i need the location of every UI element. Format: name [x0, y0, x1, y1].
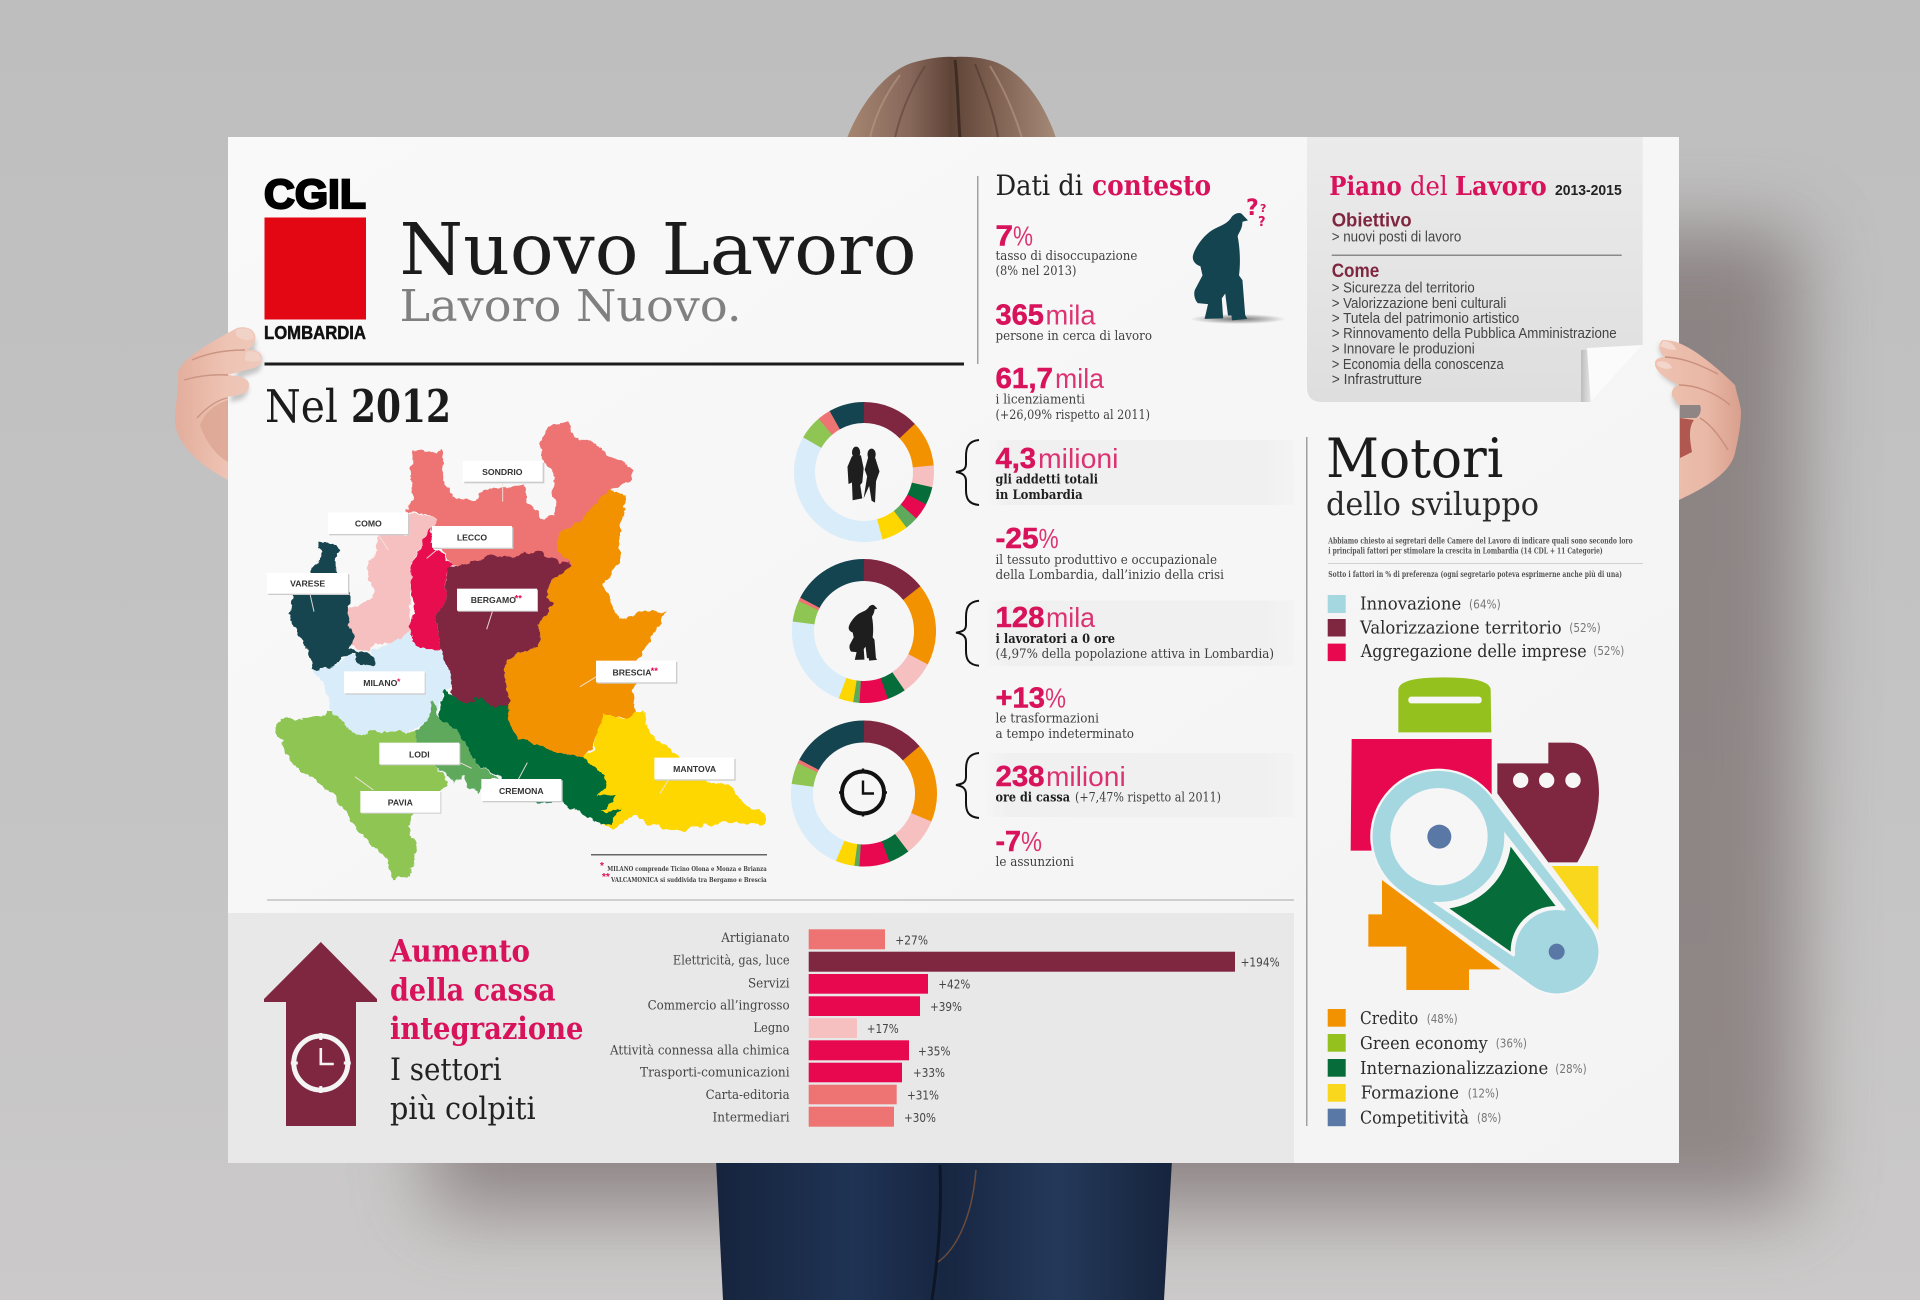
legend: other factors	[1328, 1008, 1587, 1128]
map label: Lodi: LODI	[409, 750, 430, 760]
stat: 61,7mila: 61,7	[996, 363, 1053, 395]
stat: 238 milioni: (+7,47% rispetto al 2011)	[1075, 791, 1221, 806]
legend: top factors: Aggregazione delle imprese	[1360, 641, 1587, 662]
map label: Cremona	[481, 779, 563, 802]
heading: Nel 2012	[265, 380, 451, 433]
map label: Brescia: **	[651, 666, 658, 676]
objective: Obiettivo	[1332, 210, 1412, 231]
stat: 7% disoccupazione: %	[1013, 221, 1033, 252]
panel heading	[1329, 172, 1622, 202]
shape: competitività dots	[1427, 825, 1565, 960]
stat: 238 milioni	[996, 761, 1221, 806]
icon: two people	[847, 447, 880, 503]
stat: 128mila	[996, 602, 1274, 662]
map label: Brescia: BRESCIA	[613, 667, 652, 677]
stat: 365mila: 365	[996, 300, 1044, 332]
shape: internazionalizzazione green	[1449, 847, 1556, 952]
legend: other factors: (48%)	[1427, 1012, 1458, 1026]
person: jeans	[716, 1160, 1172, 1300]
poster sheet	[228, 137, 1679, 1163]
stat: -7%: %	[1021, 826, 1042, 857]
bar: Commercio: +39%	[930, 999, 962, 1014]
legend: other factors: Internazionalizzazione	[1360, 1058, 1548, 1079]
heading: Motori dello sviluppo: dello sviluppo	[1326, 485, 1539, 523]
heading: Motori dello sviluppo: Motori	[1326, 427, 1503, 490]
donut chart 3: ore di cassa	[777, 706, 951, 881]
map footnotes: VALCAMONICA si suddivida tra Bergamo e Brescia	[610, 876, 767, 884]
bar: Servizi	[748, 974, 970, 994]
heading: Aumento della cassa integrazione: Aumento	[389, 934, 530, 970]
map footnotes: *	[600, 861, 604, 872]
panel heading: Lavoro	[1455, 172, 1547, 202]
map label: Sondrio: SONDRIO	[482, 467, 523, 477]
stat: 4,3 milioni	[996, 443, 1118, 503]
heading: Aumento della cassa integrazione: I settori	[390, 1052, 502, 1088]
map label: Lecco	[432, 526, 513, 549]
title: Nuovo Lavoro	[400, 208, 916, 291]
objective: > nuovi posti di lavoro	[1332, 229, 1461, 245]
map label: Milano	[344, 671, 426, 695]
brace 3	[956, 753, 979, 818]
bar: Trasporti	[640, 1063, 945, 1082]
map label: Como	[328, 512, 409, 535]
intro text	[1328, 537, 1643, 580]
map label: Brescia	[596, 661, 677, 684]
how list: Come	[1332, 261, 1379, 282]
stat: 128mila: mila	[1046, 602, 1095, 633]
map label: Sondrio	[463, 461, 544, 483]
hand: right	[1655, 340, 1741, 500]
heading: Aumento della cassa integrazione	[389, 934, 584, 1127]
how list: > Infrastrutture	[1332, 372, 1422, 388]
bar: Intermediari: +30%	[904, 1110, 936, 1125]
stat: 4,3 milioni: milioni	[1038, 443, 1118, 474]
panel: Piano del Lavoro	[1307, 137, 1643, 402]
stat: 7% disoccupazione: tasso di disoccupazione	[996, 249, 1138, 264]
stat: 61,7mila: i licenziamenti	[996, 393, 1085, 408]
brace 2	[956, 601, 979, 666]
map label: Mantova: MANTOVA	[673, 764, 717, 774]
map: Lombardia provinces	[267, 422, 767, 878]
shape: aggregazione pink	[1351, 739, 1492, 851]
stat: -25%	[996, 523, 1224, 583]
legend: other factors: (12%)	[1468, 1086, 1499, 1100]
stat: 365mila: persone in cerca di lavoro	[996, 329, 1152, 344]
stat: 61,7mila: mila	[1055, 363, 1104, 394]
bar: Legno: Legno	[753, 1021, 790, 1036]
panel heading: 2013-2015	[1555, 183, 1622, 199]
heading: Dati di contesto	[996, 169, 1211, 202]
icon: clock in arrow	[291, 1033, 351, 1093]
bar: Servizi: +42%	[938, 976, 970, 991]
intro text: Sotto i fattori in % di preferenza (ogni segretario poteva esprimerne anche più di una)	[1328, 569, 1622, 580]
map label: Varese: VARESE	[290, 579, 325, 589]
province shapes	[275, 422, 767, 878]
stat: 128mila: (4,97% della popolazione attiva in Lombardia)	[996, 647, 1274, 662]
stat: 365mila: mila	[1046, 300, 1096, 331]
legend: top factors	[1328, 594, 1624, 662]
stat: 7% disoccupazione: 7	[996, 221, 1013, 253]
bar: Trasporti: Trasporti-comunicazioni	[640, 1066, 790, 1081]
stat: 238 milioni: milioni	[1046, 761, 1126, 792]
stat: +13%: a tempo indeterminato	[996, 727, 1134, 742]
bar: Attività chimica: +35%	[918, 1044, 951, 1059]
map label: Milano: MILANO	[363, 678, 398, 688]
map footnotes: **	[602, 872, 610, 883]
icon: worker with question marks: ?	[1258, 215, 1266, 230]
how list: > Tutela del patrimonio artistico	[1332, 311, 1519, 327]
legend: top factors: (52%)	[1593, 644, 1624, 658]
legend: top factors: Innovazione	[1360, 594, 1461, 614]
bar: Trasporti: +33%	[913, 1065, 945, 1080]
map label: Como: COMO	[355, 519, 382, 529]
intro text: i principali fattori per stimolare la crescita in Lombardia (14 CDL + 11 Categorie)	[1328, 546, 1603, 557]
legend: other factors: Formazione	[1361, 1083, 1459, 1104]
map footnotes	[591, 854, 767, 884]
heading: Motori dello sviluppo	[1326, 427, 1539, 523]
map label: Varese	[267, 573, 349, 595]
icon: worker with question marks: ?	[1246, 196, 1259, 221]
legend: other factors: (36%)	[1496, 1036, 1527, 1050]
stat: 4,3 milioni: gli addetti totali	[996, 472, 1098, 488]
map label: Milano: *	[397, 677, 401, 687]
stat: 238 milioni: 238	[996, 761, 1044, 793]
how list: > Valorizzazione beni culturali	[1332, 296, 1506, 312]
stat: 238 milioni: ore di cassa	[996, 791, 1070, 806]
subtitle: Lavoro Nuovo.	[400, 281, 742, 332]
bar: Artigianato: +27%	[895, 932, 928, 947]
bar: Artigianato: Artigianato	[720, 931, 790, 946]
bar: Attività chimica: Attività connessa alla chimica	[609, 1043, 790, 1058]
stat: 365mila	[996, 300, 1152, 344]
logo: CGIL Lombardia: CGIL	[264, 171, 366, 217]
shape: green economy	[1398, 677, 1491, 732]
how list: > Economia della conoscenza	[1332, 357, 1505, 373]
stat: +13%: le trasformazioni	[996, 712, 1099, 727]
legend: top factors: Valorizzazione territorio	[1359, 618, 1562, 639]
intro text: Abbiamo chiesto ai segretari delle Camere del Lavoro di indicare quali sono secondo loro	[1328, 537, 1633, 547]
brace 1	[956, 440, 979, 505]
stat: 128mila: i lavoratori a 0 ore	[996, 632, 1115, 647]
stat: +13%: %	[1045, 682, 1066, 713]
hand: left	[175, 327, 262, 480]
page fold	[1581, 345, 1643, 402]
stat: 7% disoccupazione	[996, 221, 1138, 279]
map label: Cremona: CREMONA	[499, 786, 544, 796]
highlight bands	[985, 440, 1294, 817]
how list: > Sicurezza del territorio	[1332, 280, 1475, 296]
shape: valorizzazione maroon	[1497, 743, 1599, 862]
icon: worker with question marks	[1190, 196, 1286, 324]
heading: Dati di contesto: Dati di	[996, 169, 1083, 202]
map footnotes: MILANO comprende Ticino Olona e Monza e Brianza	[607, 865, 767, 873]
donut chart 1: addetti	[780, 388, 948, 556]
map label: Bergamo	[457, 589, 538, 612]
map label: Mantova	[654, 758, 736, 781]
map label: Bergamo: BERGAMO	[471, 595, 516, 605]
panel: bottom band background	[228, 913, 1294, 1163]
bar: Elettricità: Elettricità, gas, luce	[673, 954, 790, 969]
person: hair	[847, 57, 1056, 138]
stat: 128mila: 128	[996, 602, 1044, 634]
stat: -25%: il tessuto produttivo e occupazionale	[996, 553, 1217, 568]
stat: +13%: +13	[996, 682, 1045, 714]
logo: CGIL Lombardia	[264, 171, 366, 343]
legend: other factors: Green economy	[1360, 1033, 1488, 1054]
how list: > Rinnovamento della Pubblica Amministrazione	[1332, 326, 1617, 342]
how list	[1332, 261, 1617, 388]
stat: -7%: le assunzioni	[996, 855, 1074, 870]
stat: 4,3 milioni: 4,3	[996, 443, 1036, 475]
icon: up arrow with clock	[264, 942, 377, 1126]
map label: Pavia: PAVIA	[388, 797, 414, 807]
heading: Aumento della cassa integrazione: della cassa	[390, 973, 556, 1009]
stat: -25%: -25	[996, 523, 1038, 555]
icon: worker silhouette	[849, 605, 877, 661]
shape: innovation belt	[1373, 771, 1598, 993]
bar: Legno	[753, 1018, 899, 1038]
stat: -7%: -7	[996, 826, 1021, 858]
bar chart: settori	[609, 929, 1280, 1127]
bar: Legno: +17%	[867, 1021, 899, 1036]
donut chart 2: lavoratori a 0 ore	[778, 545, 950, 717]
bar: Intermediari	[712, 1107, 936, 1127]
legend: other factors: Credito	[1360, 1008, 1418, 1029]
bar: Carta-editoria: +31%	[907, 1088, 939, 1103]
stat: 61,7mila: (+26,09% rispetto al 2011)	[996, 408, 1150, 423]
map label: Bergamo: **	[515, 594, 522, 604]
legend: other factors: (28%)	[1555, 1062, 1587, 1076]
map label: Lecco: LECCO	[457, 533, 487, 543]
stat: 4,3 milioni: in Lombardia	[996, 488, 1083, 503]
bar: Commercio: Commercio all’ingrosso	[648, 998, 790, 1013]
bar: Carta-editoria: Carta-editoria	[706, 1088, 790, 1103]
heading: Dati di contesto: contesto	[1092, 169, 1211, 202]
panel heading: del	[1410, 172, 1448, 202]
bar: Carta-editoria	[706, 1085, 939, 1104]
how list: > Innovare le produzioni	[1332, 342, 1475, 358]
objective	[1332, 210, 1461, 245]
bar: Servizi: Servizi	[748, 976, 790, 991]
legend: other factors: Competitività	[1360, 1107, 1469, 1128]
bar: Attività chimica	[609, 1040, 951, 1060]
shape: credit orange	[1368, 880, 1501, 990]
stat: -7%	[996, 826, 1074, 870]
stat: 61,7mila	[996, 363, 1150, 423]
stat: -25%: %	[1039, 523, 1059, 554]
stat: +13%	[996, 682, 1134, 742]
icon: clock	[839, 768, 887, 816]
legend: other factors: (8%)	[1477, 1111, 1501, 1125]
logo: CGIL Lombardia: LOMBARDIA	[264, 323, 366, 343]
illustration: engine of development	[1351, 677, 1599, 993]
heading: Nel 2012: 2012	[351, 380, 451, 433]
shape: formazione yellow	[1552, 866, 1598, 930]
heading: Aumento della cassa integrazione: integrazione	[390, 1011, 584, 1047]
bar: Commercio	[648, 996, 962, 1016]
panel heading: Piano	[1329, 172, 1402, 202]
bar: Artigianato	[720, 929, 928, 949]
legend: top factors: (64%)	[1469, 598, 1501, 612]
legend: top factors: (52%)	[1569, 621, 1601, 635]
bar: Intermediari: Intermediari	[712, 1110, 790, 1125]
map label: Pavia	[360, 791, 441, 814]
icon: worker with question marks: ?	[1260, 202, 1266, 215]
heading: Nel 2012: Nel	[265, 380, 338, 433]
map label: Lodi	[379, 743, 460, 765]
bar: Elettricità	[673, 952, 1280, 972]
bar: Elettricità: +194%	[1241, 954, 1280, 969]
stat: 7% disoccupazione: (8% nel 2013)	[996, 264, 1076, 279]
stat: -25%: della Lombardia, dall’inizio della crisi	[996, 568, 1224, 583]
heading: Aumento della cassa integrazione: più colpiti	[390, 1091, 536, 1127]
